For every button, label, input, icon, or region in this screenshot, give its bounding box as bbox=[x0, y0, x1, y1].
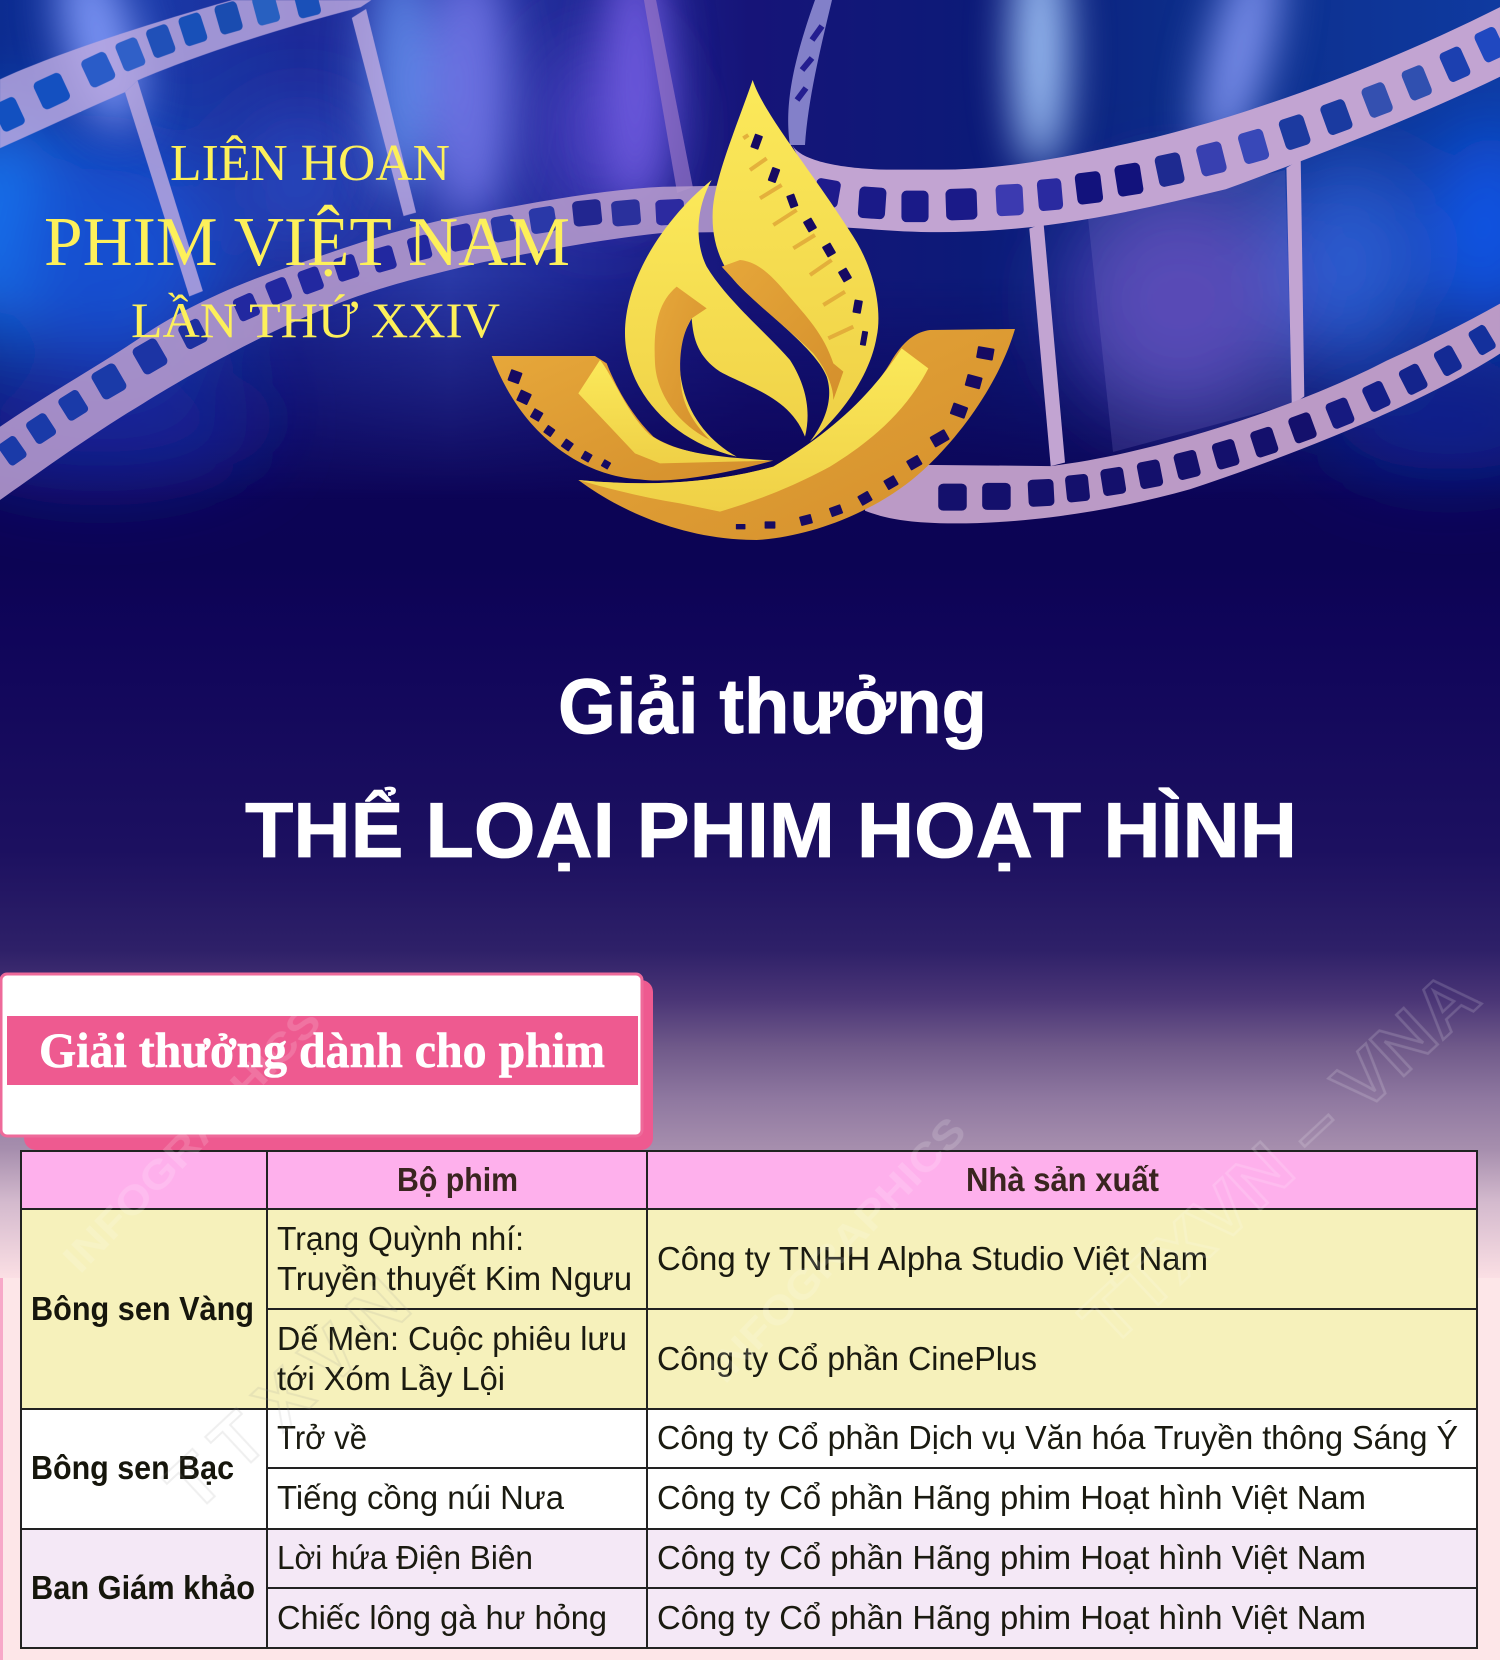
film strip: left upper and middle bbox=[0, 0, 720, 500]
award names: Bông sen Bạc bbox=[31, 1449, 234, 1486]
producers: Công ty Cổ phần Hãng phim Hoạt hình Việt Nam bbox=[657, 1539, 1366, 1576]
main heading: THỂ LOẠI PHIM HOẠT HÌNH bbox=[245, 786, 1297, 874]
film titles: Chiếc lông gà hư hỏng bbox=[277, 1599, 607, 1636]
producers bbox=[657, 1240, 1458, 1636]
film titles: Trở về bbox=[277, 1419, 367, 1456]
producers: Công ty Cổ phần Hãng phim Hoạt hình Việt Nam bbox=[657, 1599, 1366, 1636]
perforations: right lower strip bbox=[938, 324, 1497, 511]
film frame tint bbox=[1088, 170, 1292, 452]
lotus film ticks bbox=[743, 135, 853, 338]
film titles bbox=[277, 1220, 632, 1636]
film titles: Dế Mèn: Cuộc phiêu lưu bbox=[277, 1320, 627, 1357]
table header: Nhà sản xuất bbox=[966, 1161, 1159, 1198]
film titles: Lời hứa Điện Biên bbox=[277, 1539, 533, 1576]
festival title: LIÊN HOAN bbox=[170, 134, 450, 192]
film titles: Trạng Quỳnh nhí: bbox=[277, 1220, 524, 1257]
section card: film awards bbox=[1, 974, 653, 1150]
section card: film awards: Giải thưởng dành cho phim bbox=[39, 1022, 605, 1078]
watermark: INFOGRAPHICS bbox=[55, 999, 330, 1281]
festival title bbox=[44, 134, 570, 348]
table cell fills bbox=[21, 1151, 1477, 1648]
hero banner: film strips and stage lights bbox=[0, 0, 1500, 523]
festival title: PHIM VIỆT NAM bbox=[44, 204, 570, 281]
awards table bbox=[21, 1151, 1477, 1648]
watermark: TTXVN bbox=[151, 1264, 425, 1527]
perforations: left middle strip bbox=[0, 199, 685, 467]
film strip: twist above the logo bbox=[788, 0, 832, 145]
producers: Công ty Cổ phần Dịch vụ Văn hóa Truyền thông Sáng Ý bbox=[657, 1419, 1458, 1456]
award names: Ban Giám khảo bbox=[31, 1569, 255, 1606]
producers: Công ty Cổ phần CinePlus bbox=[657, 1340, 1037, 1377]
table header: Bộ phim bbox=[397, 1161, 518, 1198]
watermark bbox=[55, 955, 1494, 1527]
perforations: right upper strip bbox=[813, 25, 1500, 222]
film titles: Truyền thuyết Kim Ngưu bbox=[277, 1260, 632, 1297]
award names: Bông sen Vàng bbox=[31, 1290, 254, 1327]
film titles: Tiếng cồng núi Nưa bbox=[277, 1479, 565, 1516]
table header bbox=[397, 1161, 1159, 1198]
award names bbox=[31, 1290, 255, 1606]
main heading bbox=[245, 662, 1297, 874]
festival title: LẦN THỨ XXIV bbox=[131, 292, 500, 348]
producers: Công ty Cổ phần Hãng phim Hoạt hình Việt Nam bbox=[657, 1479, 1366, 1516]
film strip: right bbox=[792, 7, 1500, 523]
watermark: INFOGRAPHICS bbox=[700, 1109, 975, 1391]
watermark: TTXVN – VNA bbox=[1066, 955, 1494, 1362]
icon: golden lotus logo bbox=[492, 80, 1015, 540]
film titles: tới Xóm Lầy Lội bbox=[277, 1360, 505, 1397]
perforations: left upper strip bbox=[0, 0, 322, 133]
main heading: Giải thưởng bbox=[558, 662, 987, 750]
page background bbox=[0, 0, 1500, 1278]
producers: Công ty TNHH Alpha Studio Việt Nam bbox=[657, 1240, 1208, 1277]
